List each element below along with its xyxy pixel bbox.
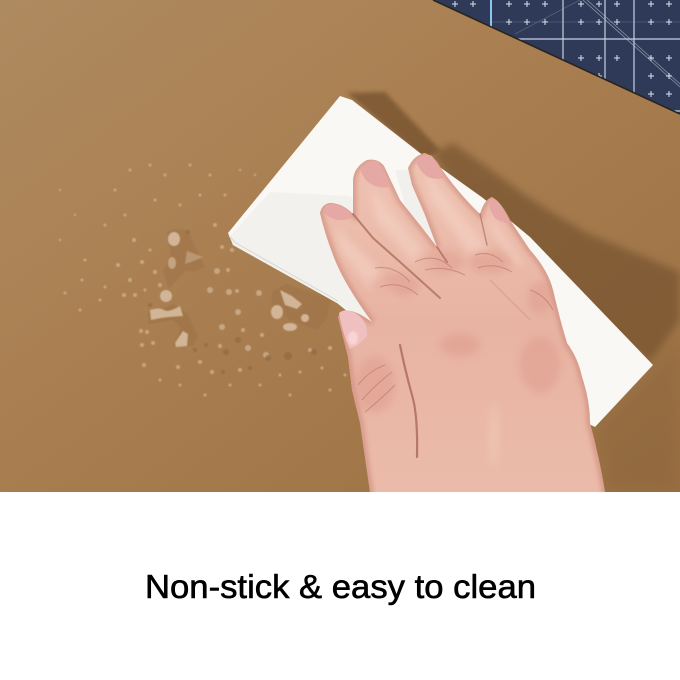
brown drop shadows bbox=[148, 230, 317, 374]
caption panel bbox=[0, 492, 680, 680]
wet patches bbox=[148, 229, 332, 346]
cutting mat in the corner bbox=[433, 0, 680, 114]
water droplets spill bbox=[59, 164, 347, 396]
thumb nail highlight bbox=[348, 331, 358, 345]
small drops bbox=[59, 164, 347, 396]
finger and thumb creases bbox=[353, 214, 530, 457]
shadow of hand and towel bbox=[347, 92, 680, 492]
water highlights bbox=[150, 232, 309, 347]
hand silhouette bbox=[320, 153, 605, 492]
brown silicone mat surface bbox=[0, 0, 680, 492]
hand shading bbox=[320, 153, 612, 520]
hand bbox=[320, 153, 612, 520]
knuckle creases bbox=[358, 254, 553, 412]
caption heading: Non-stick & easy to clean bbox=[145, 568, 536, 605]
product photo bbox=[0, 0, 680, 492]
paper towel bbox=[228, 96, 653, 427]
fingernails bbox=[323, 155, 510, 349]
